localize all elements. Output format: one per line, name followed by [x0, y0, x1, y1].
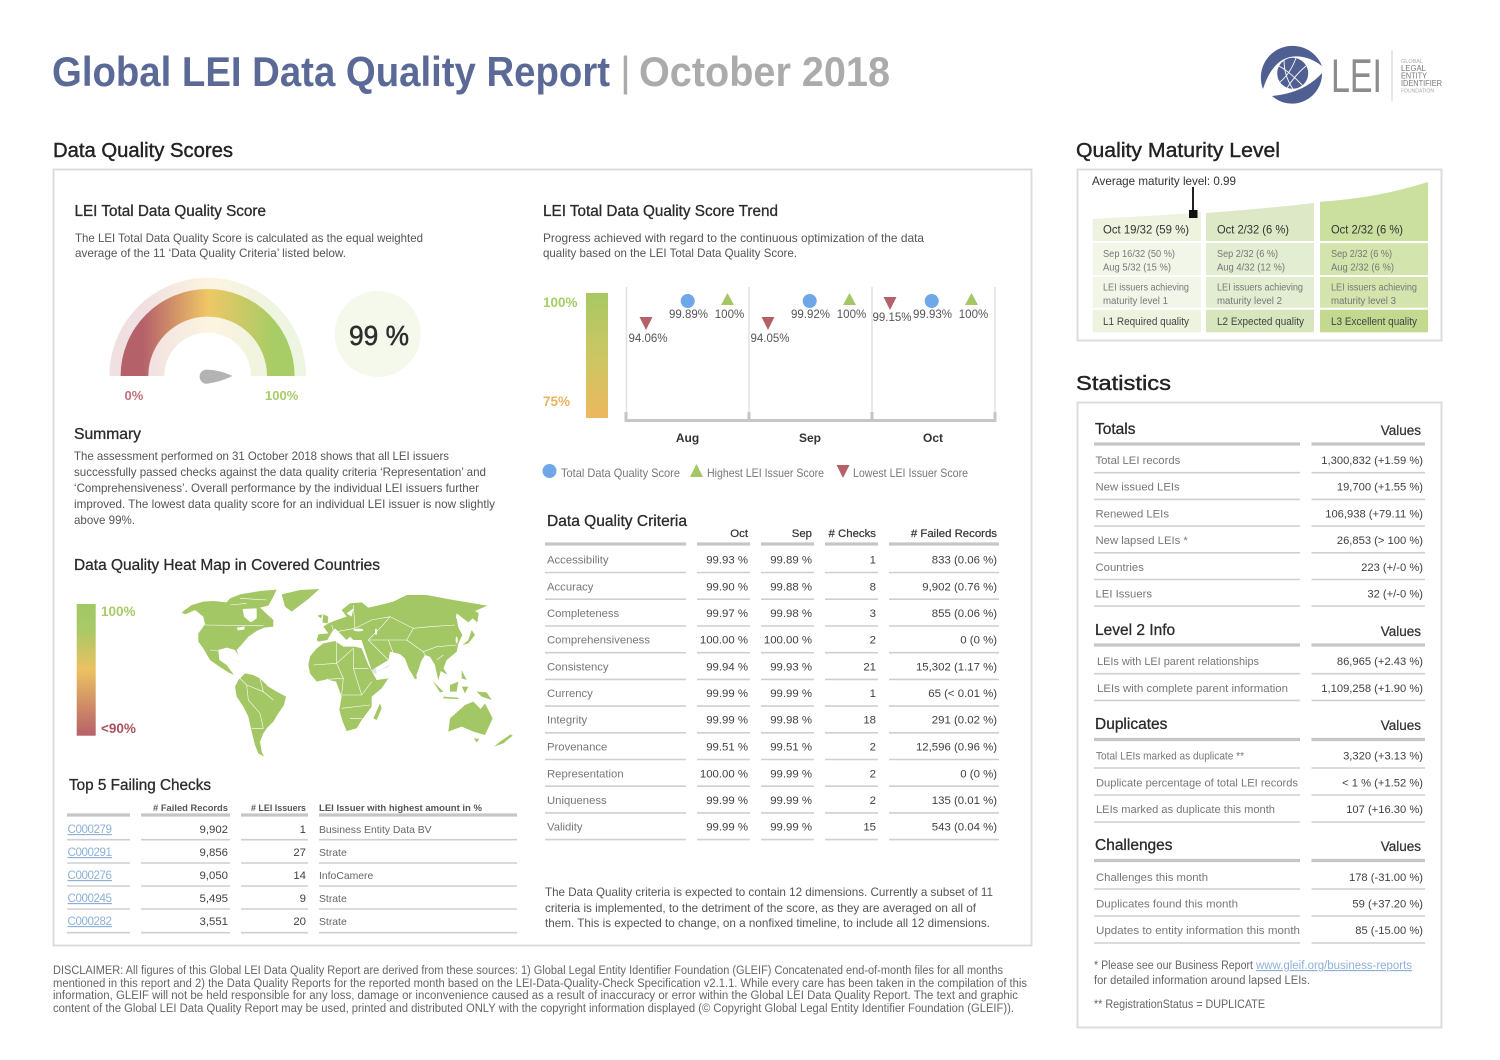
table: data quality criteria: Currency [547, 688, 593, 700]
table: data quality criteria: Representation [547, 768, 624, 780]
world map [182, 589, 513, 757]
text block: criteria note [545, 885, 993, 930]
text block: total score: LEI Total Data Quality Score [74, 203, 266, 220]
markers: Aug: 99.89% [669, 309, 708, 321]
section: totals: Totals [1095, 421, 1136, 438]
markers: Sep: 94.05% [750, 333, 790, 345]
table: data quality criteria: 855 (0.06 %) [932, 608, 997, 620]
table: top 5 failing checks: C000282 [68, 915, 112, 928]
disclaimer: mentioned in this report and 2) the Data Quality Reports for the reported month based on the LEI-Data-Quality-Check Specification v2.1.1. While every care has been taken in the compilation of this [53, 978, 1027, 990]
table: top 5 failing checks: LEI Issuer with highest amount in % [319, 803, 482, 814]
table: data quality criteria: Data Quality Criteria [547, 513, 687, 530]
table: data quality criteria: 2 [870, 768, 876, 780]
section: totals: 26,853 (> 100 %) [1337, 535, 1423, 547]
table: top 5 failing checks: 9,856 [199, 847, 228, 859]
markers: Aug [628, 293, 744, 345]
table: data quality criteria: 2 [870, 634, 876, 646]
section: duplicates: 107 (+16.30 %) [1346, 804, 1423, 816]
table: data quality criteria: 0 (0 %) [960, 768, 997, 780]
table: data quality criteria: 99.99 % [706, 821, 748, 833]
footnotes: www.gleif.org/business-reports [1255, 960, 1412, 972]
text block: total score: average of the 11 ‘Data Quality Criteria’ listed below. [75, 246, 346, 260]
table: data quality criteria: 99.99 % [770, 795, 812, 807]
table: top 5 failing checks: 27 [293, 847, 306, 859]
level 1 column: Aug 5/32 (15 %) [1103, 262, 1171, 274]
section: challenges: Updates to entity information this month [1096, 925, 1300, 937]
table: top 5 failing checks: 3,551 [199, 916, 228, 928]
section: totals: 32 (+/-0 %) [1367, 588, 1423, 600]
score circle: 99 % [335, 291, 421, 377]
table: data quality criteria: Integrity [547, 714, 588, 726]
table: top 5 failing checks: # LEI Issuers [251, 803, 306, 814]
level 2 column: maturity level 2 [1217, 296, 1282, 307]
trend chart: Sep [799, 431, 821, 445]
section: challenges: Duplicates found this month [1096, 898, 1238, 910]
section: totals: 223 (+/-0 %) [1361, 562, 1423, 574]
level 1 column: Oct 19/32 (59 %) [1103, 224, 1189, 236]
section: challenges: 85 (-15.00 %) [1355, 925, 1423, 937]
panel: statistics [1078, 402, 1442, 1028]
table: data quality criteria: 99.51 % [706, 741, 748, 753]
disclaimer: DISCLAIMER: All figures of this Global LEI Data Quality Report are derived from these sources: 1) Global Legal Entity Identifier Foundation (GLEIF) Concatenated end-of-month files for all months [53, 965, 1003, 977]
table: data quality criteria: Validity [547, 821, 583, 833]
table: data quality criteria: 99.98 % [770, 608, 812, 620]
level 2 column: L2 Expected quality [1217, 316, 1304, 328]
table: data quality criteria: 100.00 % [700, 768, 748, 780]
text block: summary: successfully passed checks against the data quality criteria ‘Representation’ and [74, 465, 486, 479]
markers: Sep: 99.92% [791, 309, 830, 321]
footnotes: for detailed information around lapsed LEIs. [1094, 975, 1310, 987]
trend legend: Highest LEI Issuer Score [707, 466, 824, 480]
markers: Sep [750, 293, 866, 345]
table: data quality criteria: 99.99 % [770, 768, 812, 780]
table: data quality criteria: 1 [870, 688, 876, 700]
table: data quality criteria: Oct [730, 528, 749, 540]
markers: Oct [872, 293, 988, 324]
table: data quality criteria: 18 [863, 714, 876, 726]
table: data quality criteria: 100.00 % [764, 634, 812, 646]
trend chart: Oct [923, 431, 943, 445]
heat map legend: 100% [101, 604, 136, 619]
section: duplicates: Duplicate percentage of total LEI records [1096, 778, 1298, 790]
text block: summary: The assessment performed on 31 October 2018 shows that all LEI issuers [74, 449, 449, 463]
logo: LEI: GLOBAL [1401, 59, 1423, 65]
table: top 5 failing checks: 9,902 [199, 824, 228, 836]
section: level 2 info: 1,109,258 (+1.90 %) [1321, 683, 1423, 695]
section: level 2 info [1094, 622, 1425, 700]
maturity marker [1189, 187, 1198, 218]
table: data quality criteria: 12,596 (0.96 %) [916, 741, 997, 753]
text block: total score [74, 203, 423, 260]
table: top 5 failing checks: 9 [300, 893, 306, 905]
disclaimer: content of the Global LEI Data Quality Report may be used, printed and distributed ONLY with the copyright information displayed (© Copyright Global Legal Entity Identifier Foundation (GLEIF)). [53, 1003, 1014, 1015]
title: October 2018 [639, 48, 890, 95]
level 2 column: Sep 2/32 (6 %) [1217, 249, 1278, 260]
level 2 column: LEI issuers achieving [1217, 283, 1303, 294]
text block: criteria note: criteria is implemented, to the detriment of the score, as they are averaged on all of [545, 901, 977, 915]
section: totals: Values [1381, 423, 1421, 438]
table: data quality criteria: Consistency [547, 661, 609, 673]
table: top 5 failing checks: C000276 [68, 869, 112, 882]
panel: quality maturity level: Average maturity level: 0.99 [1092, 174, 1236, 188]
section: duplicates: < 1 % (+1.52 %) [1342, 778, 1423, 790]
panel: data quality scores [54, 170, 1032, 946]
section: totals: 106,938 (+79.11 %) [1325, 508, 1423, 520]
table: top 5 failing checks: 9,050 [199, 870, 228, 882]
table: top 5 failing checks: # Failed Records [153, 803, 228, 814]
level 3 column: maturity level 3 [1331, 296, 1396, 307]
text block: summary: Summary [74, 426, 141, 443]
table: top 5 failing checks: Business Entity Data BV [319, 825, 432, 836]
table: data quality criteria: Provenance [547, 741, 607, 753]
heat map legend: <90% [101, 721, 136, 736]
table: data quality criteria: 99.89 % [770, 554, 812, 566]
section: challenges: 59 (+37.20 %) [1352, 898, 1423, 910]
table: top 5 failing checks: C000245 [68, 892, 112, 905]
section: challenges: Values [1381, 839, 1421, 854]
level 1 column: L1 Required quality [1103, 316, 1189, 328]
table: data quality criteria: Uniqueness [547, 795, 607, 807]
heading: Statistics: Statistics [1076, 373, 1171, 395]
table: top 5 failing checks: Strate [319, 848, 347, 859]
table: data quality criteria: Accessibility [547, 554, 609, 566]
section: totals: 19,700 (+1.55 %) [1337, 482, 1423, 494]
table: top 5 failing checks: 20 [293, 916, 306, 928]
table: data quality criteria: Comprehensiveness [547, 634, 650, 646]
table: top 5 failing checks: 1 [300, 824, 306, 836]
table: top 5 failing checks: 5,495 [199, 893, 228, 905]
footnotes [1094, 960, 1412, 1011]
section: duplicates: LEIs marked as duplicate this month [1096, 804, 1275, 816]
section: level 2 info: LEIs with LEI parent relationships [1097, 656, 1259, 668]
section: totals: Countries [1096, 562, 1144, 574]
section: challenges: Challenges [1095, 837, 1173, 854]
disclaimer: information, GLEIF will not be held responsible for any loss, damage or inconvenience caused as a result of inaccuracy or error within the Global LEI Data Quality Report. The text and graphic [53, 990, 1018, 1002]
table: data quality criteria: 99.98 % [770, 714, 812, 726]
section: level 2 info: Level 2 Info [1095, 622, 1175, 639]
table: data quality criteria: 543 (0.04 %) [932, 821, 997, 833]
level 1 column [1093, 212, 1201, 332]
table: data quality criteria: 100.00 % [700, 634, 748, 646]
table: data quality criteria: 1 [870, 554, 876, 566]
heat map legend [77, 604, 136, 736]
markers: Oct: 99.15% [872, 312, 912, 324]
panel: quality maturity level [1078, 170, 1442, 340]
level 2 column [1206, 203, 1314, 332]
table: data quality criteria: # Checks [829, 528, 876, 540]
section: duplicates [1094, 716, 1425, 822]
table: data quality criteria: 291 (0.02 %) [932, 714, 997, 726]
trend legend [542, 464, 968, 480]
level 3 column: Aug 2/32 (6 %) [1331, 262, 1394, 274]
table: data quality criteria: 15 [863, 821, 876, 833]
table: data quality criteria: 99.94 % [706, 661, 748, 673]
table: data quality criteria [545, 513, 999, 840]
gauge chart: 0% [124, 388, 144, 403]
level 1 column: Sep 16/32 (50 %) [1103, 249, 1175, 260]
heading: Data Quality Scores: Data Quality Scores [53, 140, 233, 162]
table: data quality criteria: 99.99 % [770, 821, 812, 833]
markers: Aug: 94.06% [628, 333, 668, 345]
table: data quality criteria: 99.93 % [706, 554, 748, 566]
text block: summary [74, 426, 495, 527]
level 2 column: Aug 4/32 (12 %) [1217, 262, 1285, 274]
table: top 5 failing checks: InfoCamere [319, 871, 374, 882]
table: data quality criteria: 8 [870, 581, 876, 593]
trend chart [543, 287, 995, 445]
table: data quality criteria: 0 (0 %) [960, 634, 997, 646]
table: data quality criteria: 135 (0.01 %) [932, 795, 997, 807]
text block: total score: The LEI Total Data Quality Score is calculated as the equal weighted [75, 231, 423, 245]
table: data quality criteria: 99.99 % [706, 688, 748, 700]
logo: LEI: LEGAL [1401, 63, 1426, 73]
table: data quality criteria: 9,902 (0.76 %) [922, 581, 997, 593]
table: data quality criteria: Sep [792, 528, 812, 540]
table: data quality criteria: 99.99 % [706, 795, 748, 807]
table: data quality criteria: # Failed Records [911, 528, 997, 540]
logo: LEI [1261, 46, 1442, 104]
logo: LEI: ENTITY [1401, 70, 1427, 80]
title: Global LEI Data Quality Report [52, 48, 610, 95]
level 1 column: LEI issuers achieving [1103, 283, 1189, 294]
level 2 column: Oct 2/32 (6 %) [1217, 224, 1289, 236]
table: data quality criteria: 99.93 % [770, 661, 812, 673]
gauge chart: 100% [265, 388, 299, 403]
level 3 column: Oct 2/32 (6 %) [1331, 224, 1403, 236]
markers: Aug: 100% [715, 309, 744, 321]
level 3 column: LEI issuers achieving [1331, 283, 1417, 294]
table: top 5 failing checks: C000291 [68, 846, 112, 859]
trend chart: 100% [543, 295, 578, 310]
table: data quality criteria: 99.90 % [706, 581, 748, 593]
table: data quality criteria: Completeness [547, 608, 620, 620]
score circle: 99 %: 99 % [349, 320, 409, 351]
markers: Oct: 100% [959, 309, 988, 321]
section: totals: New issued LEIs [1096, 482, 1180, 494]
table: top 5 failing checks: Strate [319, 917, 347, 928]
section: totals: LEI Issuers [1096, 588, 1152, 600]
trend chart: 75% [543, 394, 570, 409]
table: data quality criteria: 99.99 % [706, 714, 748, 726]
text block: trend [543, 203, 924, 260]
table: top 5 failing checks [67, 777, 517, 933]
table: data quality criteria: 65 (< 0.01 %) [928, 688, 997, 700]
footnotes: ** RegistrationStatus = DUPLICATE [1094, 999, 1265, 1011]
section: challenges: 178 (-31.00 %) [1349, 872, 1423, 884]
text block: summary: ‘Comprehensiveness’. Overall performance by the individual LEI issuers further [74, 481, 479, 495]
section: challenges [1094, 837, 1425, 943]
level 3 column: L3 Excellent quality [1331, 316, 1417, 328]
section: duplicates: 3,320 (+3.13 %) [1343, 750, 1423, 762]
section: level 2 info: LEIs with complete parent information [1097, 683, 1288, 695]
logo: LEI: LEI [1331, 49, 1382, 102]
text block: trend: quality based on the LEI Total Data Quality Score. [543, 246, 797, 260]
table: data quality criteria: 99.97 % [706, 608, 748, 620]
text block: trend: Progress achieved with regard to the continuous optimization of the data [543, 231, 924, 245]
trend legend: Lowest LEI Issuer Score [853, 466, 968, 480]
markers: Sep: 100% [837, 309, 866, 321]
table: data quality criteria: 15,302 (1.17 %) [916, 661, 997, 673]
heading: heat map: Data Quality Heat Map in Covered Countries [74, 557, 380, 574]
section: challenges: Challenges this month [1096, 872, 1208, 884]
section: totals [1094, 421, 1425, 606]
section: totals: Total LEI records [1096, 455, 1181, 467]
disclaimer [53, 965, 1027, 1015]
table: top 5 failing checks: C000279 [68, 823, 112, 836]
section: totals: Renewed LEIs [1096, 508, 1169, 520]
table: data quality criteria: 2 [870, 795, 876, 807]
footnotes: * Please see our Business Report [1094, 960, 1254, 972]
section: totals: New lapsed LEIs * [1096, 535, 1188, 547]
level 3 column: Sep 2/32 (6 %) [1331, 249, 1392, 260]
gauge needle [200, 370, 232, 384]
table: data quality criteria: 21 [863, 661, 876, 673]
markers: Oct: 99.93% [913, 309, 952, 321]
logo: LEI: IDENTIFIER [1401, 78, 1442, 88]
table: data quality criteria: 3 [870, 608, 876, 620]
trend chart: Aug [676, 431, 699, 445]
section: level 2 info: Values [1381, 624, 1421, 639]
table: data quality criteria: 99.88 % [770, 581, 812, 593]
table: data quality criteria: Accuracy [547, 581, 594, 593]
table: top 5 failing checks: Top 5 Failing Checks [69, 777, 211, 794]
level 3 column [1320, 182, 1428, 332]
section: totals: 1,300,832 (+1.59 %) [1321, 455, 1423, 467]
table: data quality criteria: 99.99 % [770, 688, 812, 700]
gauge chart [109, 278, 306, 403]
title: | [620, 48, 631, 95]
section: duplicates: Values [1381, 718, 1421, 733]
text block: criteria note: The Data Quality criteria is expected to contain 12 dimensions. Currently a subset of 11 [545, 885, 993, 899]
trend legend: Total Data Quality Score [561, 466, 680, 480]
section: level 2 info: 86,965 (+2.43 %) [1337, 656, 1423, 668]
table: data quality criteria: 2 [870, 741, 876, 753]
logo: LEI: FOUNDATION [1401, 88, 1434, 94]
section: duplicates: Duplicates [1095, 716, 1168, 733]
table: top 5 failing checks: Strate [319, 894, 347, 905]
heading: Quality Maturity Level: Quality Maturity Level [1076, 140, 1280, 162]
section: duplicates: Total LEIs marked as duplicate ** [1096, 750, 1245, 762]
text block: summary: above 99%. [74, 513, 135, 527]
table: data quality criteria: 833 (0.06 %) [932, 554, 997, 566]
table: data quality criteria: 99.51 % [770, 741, 812, 753]
text block: trend: LEI Total Data Quality Score Trend [543, 203, 778, 220]
level 1 column: maturity level 1 [1103, 296, 1168, 307]
text block: summary: improved. The lowest data quality score for an individual LEI issuer is now slightly [74, 497, 495, 511]
text block: criteria note: them. This is expected to change, on a nonfixed timeline, to include all 12 dimensions. [545, 916, 990, 930]
table: top 5 failing checks: 14 [293, 870, 306, 882]
